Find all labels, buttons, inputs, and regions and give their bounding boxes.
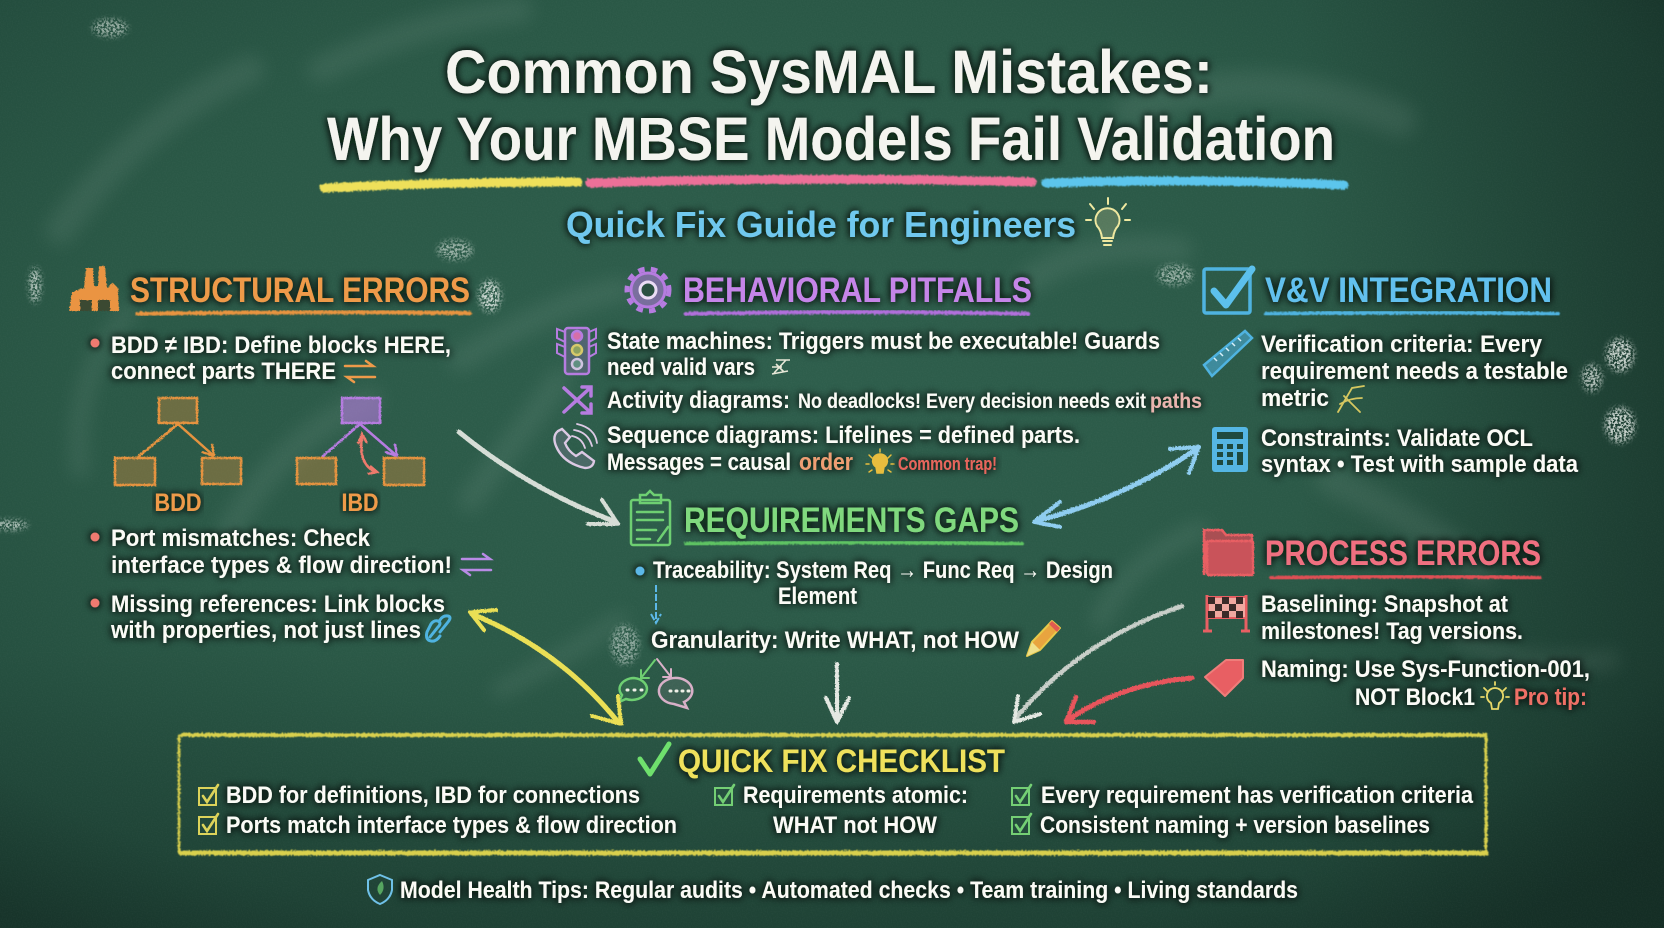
checklist column: structure: BDD for definitions, IBD for connections <box>226 782 640 809</box>
icon: chat bubbles <box>619 659 692 708</box>
text: naming <box>1261 656 1590 711</box>
icon: clipboard <box>631 491 670 545</box>
text: constraints <box>1261 425 1578 478</box>
heading underline <box>686 312 1028 314</box>
arrow: structural to checklist <box>470 610 621 724</box>
text: sequence diagrams: Messages = causal <box>607 449 791 476</box>
title underline: tricolor chalk stroke <box>324 179 1344 188</box>
subtitle: Quick Fix Guide for Engineers <box>566 204 1076 245</box>
panel: v&v integration <box>1204 269 1578 478</box>
icon: telephone <box>554 424 597 468</box>
bullet: port mismatches: Port mismatches: Check <box>111 525 370 552</box>
checklist column: structure <box>226 782 677 839</box>
icon: folder <box>1204 530 1253 575</box>
title: Why Your MBSE Models Fail Validation <box>327 105 1335 173</box>
icon: price tag <box>1205 660 1243 696</box>
icon: yellow squiggle <box>1338 386 1364 412</box>
text: activity diagrams: No deadlocks! Every decision needs exit <box>798 390 1146 413</box>
heading underline <box>686 542 1022 544</box>
text: verification criteria: metric <box>1261 385 1329 412</box>
checklist column: requirements: Requirements atomic: <box>743 782 968 809</box>
text: verification criteria <box>1261 331 1568 412</box>
heading: process errors: PROCESS ERRORS <box>1265 534 1541 573</box>
arrow: naming to checklist <box>1066 678 1192 722</box>
checklist column: requirements <box>743 782 968 839</box>
heading: quick fix checklist: QUICK FIX CHECKLIST <box>678 743 1005 779</box>
title: Common SysMAL Mistakes: <box>445 38 1213 106</box>
checkboxes: yellow <box>199 785 218 834</box>
text: granularity: Granularity: Write WHAT, not HOW <box>651 627 1020 654</box>
title <box>327 38 1335 173</box>
panel: process errors <box>1203 530 1590 711</box>
heading: v&v integration: V&V INTEGRATION <box>1265 271 1552 310</box>
bullet: missing references: with properties, not just lines <box>110 617 421 644</box>
text: baselining: Baselining: Snapshot at <box>1261 591 1508 618</box>
bullet: BDD vs IBD: BDD ≠ IBD: Define blocks HERE, <box>111 332 451 359</box>
icon: calculator <box>1212 427 1248 472</box>
icon: small yellow bulb <box>866 449 894 473</box>
icon: crossing arrows <box>564 387 591 413</box>
text: baselining <box>1261 591 1523 645</box>
text: sequence diagrams <box>607 422 1080 476</box>
bullet: BDD vs IBD: connect parts THERE <box>111 358 336 385</box>
icon: ruler <box>1204 331 1252 376</box>
label: IBD: IBD <box>342 489 378 517</box>
icon: gear <box>627 269 669 311</box>
icon: green check <box>640 744 669 774</box>
callout: pro tip: Pro tip: <box>1514 684 1587 711</box>
checklist column: verification and naming: Consistent naming + version baselines <box>1040 812 1430 839</box>
text: traceability: Element <box>778 583 857 610</box>
text: activity diagrams: Activity diagrams: <box>607 387 790 414</box>
icon: small bulb <box>1481 682 1509 709</box>
bullet: missing references: Missing references: Link blocks <box>111 591 445 618</box>
text: baselining: milestones! Tag versions. <box>1261 618 1523 645</box>
bullet: port mismatches <box>90 525 452 579</box>
icon: light bulb <box>1086 198 1130 245</box>
arrow: requirements down to checklist <box>826 664 849 722</box>
heading underline <box>1266 312 1558 314</box>
icon: pencil <box>1027 621 1060 656</box>
icon: checked box <box>1204 269 1252 313</box>
arrow: requirements to v&v <box>1034 447 1199 527</box>
bullet: BDD vs IBD <box>90 332 451 385</box>
icon: orange exchange arrows <box>345 361 375 382</box>
text: activity diagrams <box>607 387 1202 414</box>
checkboxes: green <box>1012 785 1031 834</box>
icon: chain link <box>426 616 450 641</box>
icon: checkered barrier <box>1203 595 1250 631</box>
arrow: baselining to checklist <box>1014 606 1182 722</box>
text: naming: NOT Block1 <box>1355 684 1475 711</box>
callout: common trap: Common trap! <box>898 453 997 474</box>
text: state machines: need valid vars <box>607 354 755 381</box>
heading: behavioral pitfalls: BEHAVIORAL PITFALLS <box>683 271 1032 310</box>
heading: structural errors: STRUCTURAL ERRORS <box>130 271 470 310</box>
text: activity diagrams: paths <box>1150 390 1202 413</box>
panel: quick fix checklist <box>179 735 1486 853</box>
icon: small scribble <box>772 360 790 374</box>
checklist column: structure: Ports match interface types & flow direction <box>226 812 677 839</box>
icon: traffic light <box>557 328 596 374</box>
heading: requirements gaps: REQUIREMENTS GAPS <box>684 501 1019 540</box>
bullet: missing references <box>90 591 445 644</box>
heading underline <box>137 312 470 314</box>
text: constraints: syntax • Test with sample data <box>1261 451 1578 478</box>
panel: behavioral pitfalls <box>554 269 1202 476</box>
diagram: IBD <box>297 398 424 485</box>
text: sequence diagrams: Sequence diagrams: Lifelines = defined parts. <box>607 422 1080 449</box>
checklist frame <box>179 735 1486 853</box>
checkbox: green <box>715 785 734 805</box>
footer: model health tips: Model Health Tips: Regular audits • Automated checks • Team training • Living standards <box>400 877 1298 904</box>
bullet: port mismatches: interface types & flow direction! <box>111 552 452 579</box>
icon: shield <box>368 875 392 904</box>
checklist column: requirements: WHAT not HOW <box>773 812 938 839</box>
checklist column: verification and naming: Every requirement has verification criteria <box>1041 782 1473 809</box>
panel: requirements gaps <box>619 491 1113 708</box>
label: BDD: BDD <box>154 489 202 517</box>
icon: purple exchange arrows <box>462 554 491 575</box>
diagram: BDD <box>115 398 241 485</box>
text: verification criteria: Verification criteria: Every <box>1261 331 1542 358</box>
text: state machines <box>607 328 1160 381</box>
icon: factory <box>69 266 119 311</box>
arrow: structural to requirements <box>459 432 618 524</box>
text: state machines: State machines: Triggers must be executable! Guards <box>607 328 1160 355</box>
panel: structural errors <box>69 266 491 644</box>
text: traceability <box>636 557 1113 610</box>
text: naming: Naming: Use Sys-Function-001, <box>1261 656 1590 683</box>
icon: dotted down arrow <box>651 585 661 623</box>
heading underline <box>1271 576 1540 578</box>
text: sequence diagrams: order <box>799 449 853 476</box>
text: constraints: Constraints: Validate OCL <box>1261 425 1533 452</box>
text: traceability: Traceability: System Req → Func Req → Design <box>653 557 1113 584</box>
checklist column: verification and naming <box>1040 782 1473 839</box>
text: verification criteria: requirement needs a testable <box>1261 358 1568 385</box>
